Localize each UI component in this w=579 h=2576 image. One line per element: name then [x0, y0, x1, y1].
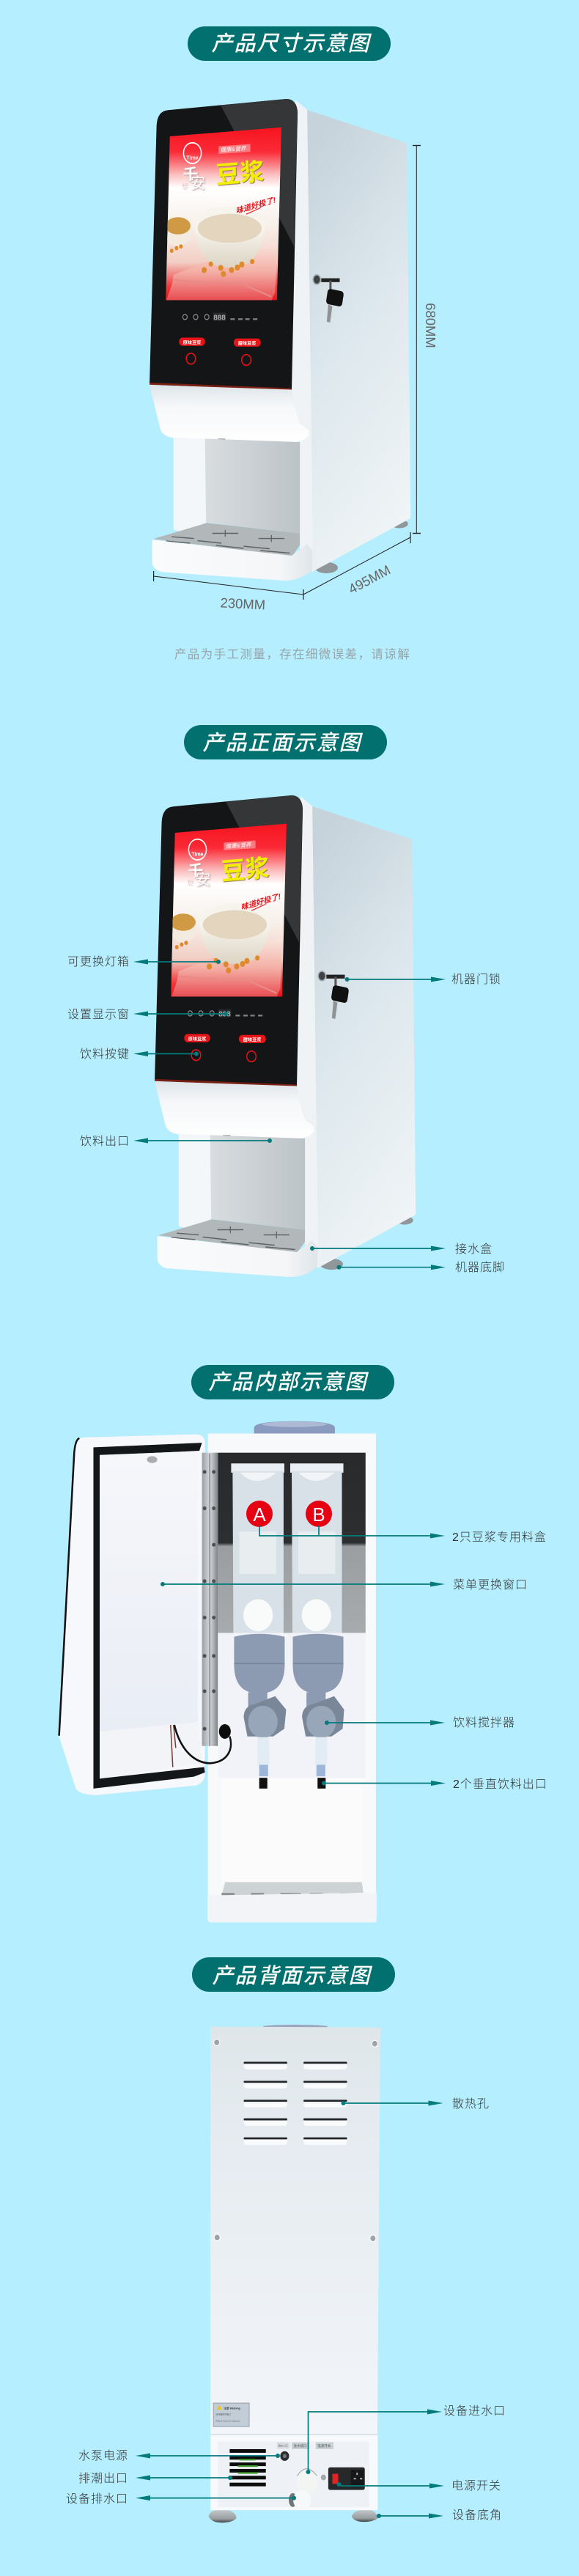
machine: front three-quarter view: 味道好极了! [235, 195, 277, 216]
machine: front view: 原味豆浆 [188, 1036, 207, 1042]
back port labels [277, 2443, 333, 2449]
machine: front three-quarter view: 安 [190, 175, 205, 192]
machine: front view: 健康&营养 [225, 842, 252, 850]
mixers [234, 1634, 344, 1789]
section: product dimensions [150, 26, 438, 661]
callout: water inlet: 设备进水口 [443, 2404, 506, 2418]
base block [210, 2435, 377, 2510]
warning label: 请勿触摸风扇口 [215, 2413, 231, 2416]
callout: replaceable light box: 可更换灯箱 [67, 955, 130, 968]
callout: drink mixer [325, 1716, 515, 1729]
callout: drink mixer: 饮料搅拌器 [453, 1716, 515, 1729]
power cable [174, 1724, 231, 1763]
heading: rear view: 产品背面示意图 [212, 1965, 372, 1988]
dimension: depth 495MM: 495MM [346, 562, 393, 597]
callout: drink outlet [80, 1135, 272, 1148]
dimension: width 230MM: 230MM [220, 595, 266, 613]
heading: rear view [192, 1957, 395, 1992]
callout: drink button: 饮料按键 [80, 1048, 130, 1061]
machine: front three-quarter view: 梦 [182, 172, 188, 180]
machine: front view: 安 [195, 872, 210, 888]
warning label: 注意 Warning [224, 2406, 240, 2410]
callout: door lock: 机器门锁 [451, 973, 501, 986]
callout: menu window: 菜单更换窗口 [453, 1578, 528, 1591]
callout: two vertical outlets [322, 1778, 547, 1791]
vent slots [244, 2062, 347, 2145]
callout: drip tray: 接水盒 [455, 1243, 493, 1256]
drain port [289, 2490, 311, 2510]
back port labels: 进水接口 [294, 2443, 307, 2448]
heading: front view: 产品正面示意图 [202, 732, 363, 755]
callout: menu window [161, 1578, 528, 1591]
machine: front view: 千 [188, 863, 203, 880]
callout: heat vents [342, 2097, 490, 2111]
exhaust fan grill [229, 2449, 266, 2487]
machine: front three-quarter view: 健康&营养 [220, 145, 247, 153]
machine: front three-quarter view: 想 [182, 183, 188, 191]
callout: A and B hoppers: B [312, 1504, 325, 1526]
warning label [213, 2403, 249, 2426]
door panel [59, 1435, 205, 1795]
machine: rear view [209, 2025, 380, 2522]
footnote: 产品为手工测量，存在细微误差，请谅解 [174, 647, 410, 661]
callout: drain outlet: 设备排水口 [66, 2492, 128, 2506]
callout: foot [377, 2509, 502, 2522]
callout: pump power [78, 2449, 280, 2462]
callout: power switch: 电源开关 [451, 2479, 501, 2492]
machine: front three-quarter view: 千 [182, 166, 198, 183]
feet [209, 2510, 378, 2522]
callout: two vertical outlets: 2个垂直饮料出口 [453, 1778, 547, 1791]
blue top ring [254, 1421, 335, 1435]
machine: front view: 想 [187, 879, 193, 887]
machine: front three-quarter view: 甜味豆浆 [238, 341, 257, 347]
back port labels: 热水入口 [279, 2444, 288, 2448]
callout: power switch [337, 2479, 501, 2492]
callout: pump power: 水泵电源 [78, 2449, 128, 2462]
callout: heat vents: 散热孔 [452, 2097, 490, 2111]
machine: front three-quarter view: 888 [213, 314, 226, 323]
callout: replaceable light box [67, 955, 221, 968]
hoppers [231, 1463, 344, 1633]
callout: exhaust outlet: 排潮出口 [78, 2472, 128, 2485]
dimension: width 230MM [154, 571, 303, 613]
machine: front view [155, 795, 416, 1277]
power socket [328, 2468, 365, 2490]
machine: front view: Time [191, 853, 204, 858]
callout: drink outlet: 饮料出口 [80, 1135, 130, 1148]
machine: front view: 味道好极了! [240, 891, 282, 912]
warning label: Please keep the distance [215, 2419, 240, 2422]
machine: front view: 梦 [187, 869, 193, 876]
machine: front view: 豆浆 [220, 854, 270, 886]
inlet port [297, 2468, 317, 2495]
section: interior view [59, 1365, 547, 1922]
heading: interior view [191, 1365, 394, 1399]
dimension: height 680MM: 680MM [423, 303, 438, 348]
section: front view [67, 725, 505, 1277]
callout: machine foot: 机器底脚 [455, 1261, 505, 1274]
callout: drink button [80, 1048, 199, 1061]
pump connector [280, 2451, 289, 2461]
machine: front view: 甜味豆浆 [243, 1037, 262, 1043]
rear panel [210, 2027, 380, 2435]
callout: A and B hoppers: 2只豆浆专用料盒 [452, 1531, 547, 1544]
heading: interior view: 产品内部示意图 [208, 1371, 369, 1394]
heading: front view [184, 725, 387, 759]
callout: door lock [345, 973, 501, 986]
callout: foot: 设备底角 [452, 2509, 502, 2522]
hinge [202, 1453, 218, 1746]
heading: dimensions: 产品尺寸示意图 [211, 32, 372, 56]
callout: settings display: 设置显示窗 [67, 1008, 130, 1021]
callout: machine foot [337, 1261, 505, 1274]
callout: drain outlet [66, 2492, 296, 2506]
machine: front view: 888 [218, 1011, 231, 1019]
callout: A and B hoppers: A [253, 1504, 266, 1526]
machine: front three-quarter view: 豆浆 [215, 158, 265, 189]
machine: open door interior [59, 1421, 377, 1922]
callout: drip tray [310, 1243, 493, 1256]
section: rear view [66, 1957, 506, 2522]
dimension: depth 495MM [303, 532, 410, 600]
screws [214, 2039, 377, 2242]
callout: A and B hoppers [246, 1501, 547, 1544]
machine: front three-quarter view: 原味豆浆 [183, 339, 202, 345]
machine body [207, 1434, 377, 1922]
callout: exhaust outlet [78, 2472, 232, 2485]
callout: water inlet [306, 2404, 506, 2474]
machine: front three-quarter view: Time [186, 156, 199, 161]
heading: dimensions [188, 26, 391, 61]
back port labels: 电源开关 [317, 2443, 331, 2448]
callout: settings display [67, 1008, 228, 1021]
machine: front three-quarter view [150, 99, 410, 581]
